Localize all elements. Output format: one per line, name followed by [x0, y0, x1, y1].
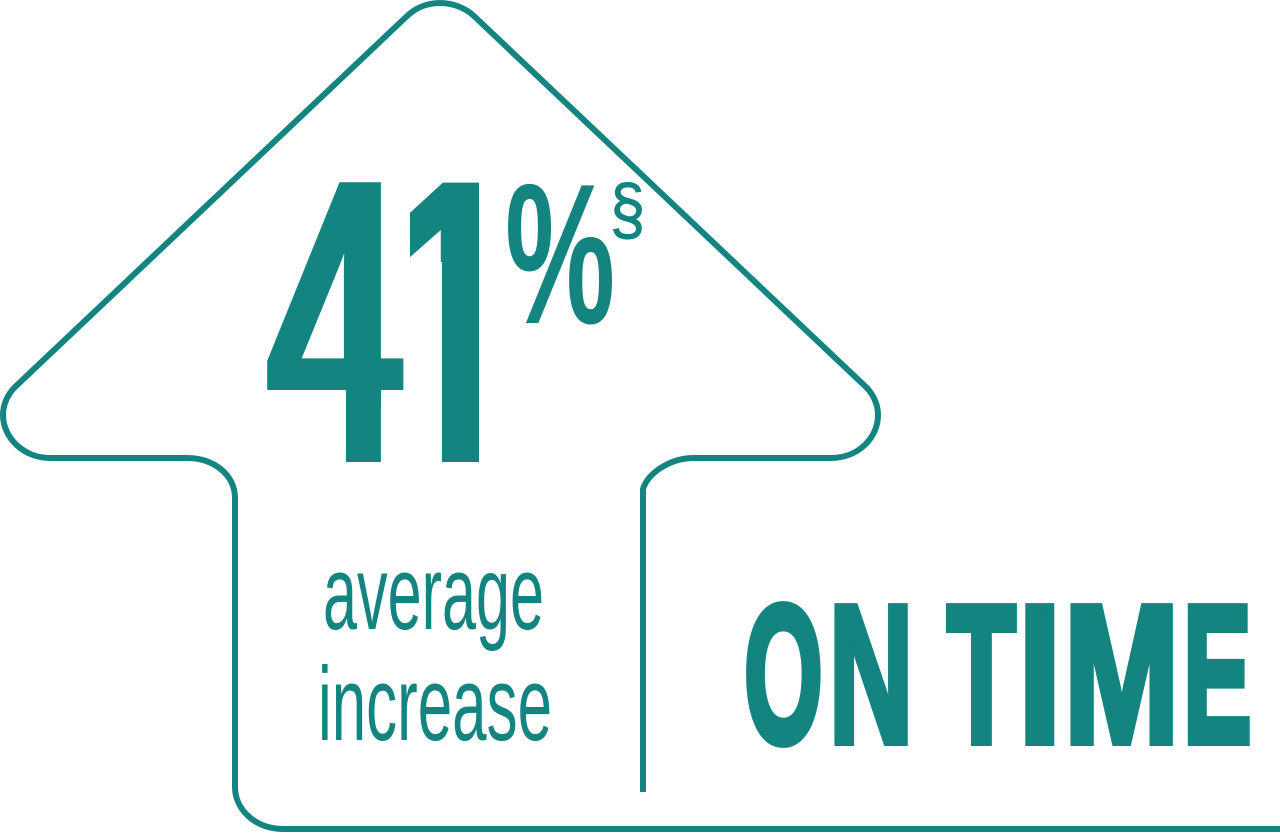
statistic: 41 percent: [267, 182, 642, 462]
heading: on time: [744, 564, 1252, 785]
word: average: average: [323, 535, 544, 652]
section mark footnote: §: [610, 171, 645, 249]
number 4: 4: [266, 100, 404, 542]
heading: on time: T: [947, 564, 1016, 784]
heading: on time: M: [1064, 564, 1179, 784]
word: increase: increase: [318, 646, 552, 763]
number 1: 1: [374, 94, 534, 548]
heading: on time: I: [1018, 564, 1062, 784]
label: average increase: [318, 535, 552, 763]
heading: on time: E: [1183, 565, 1252, 785]
percent sign: %: [505, 143, 615, 366]
heading: on time: O: [744, 566, 823, 785]
heading: on time: N: [829, 566, 913, 785]
